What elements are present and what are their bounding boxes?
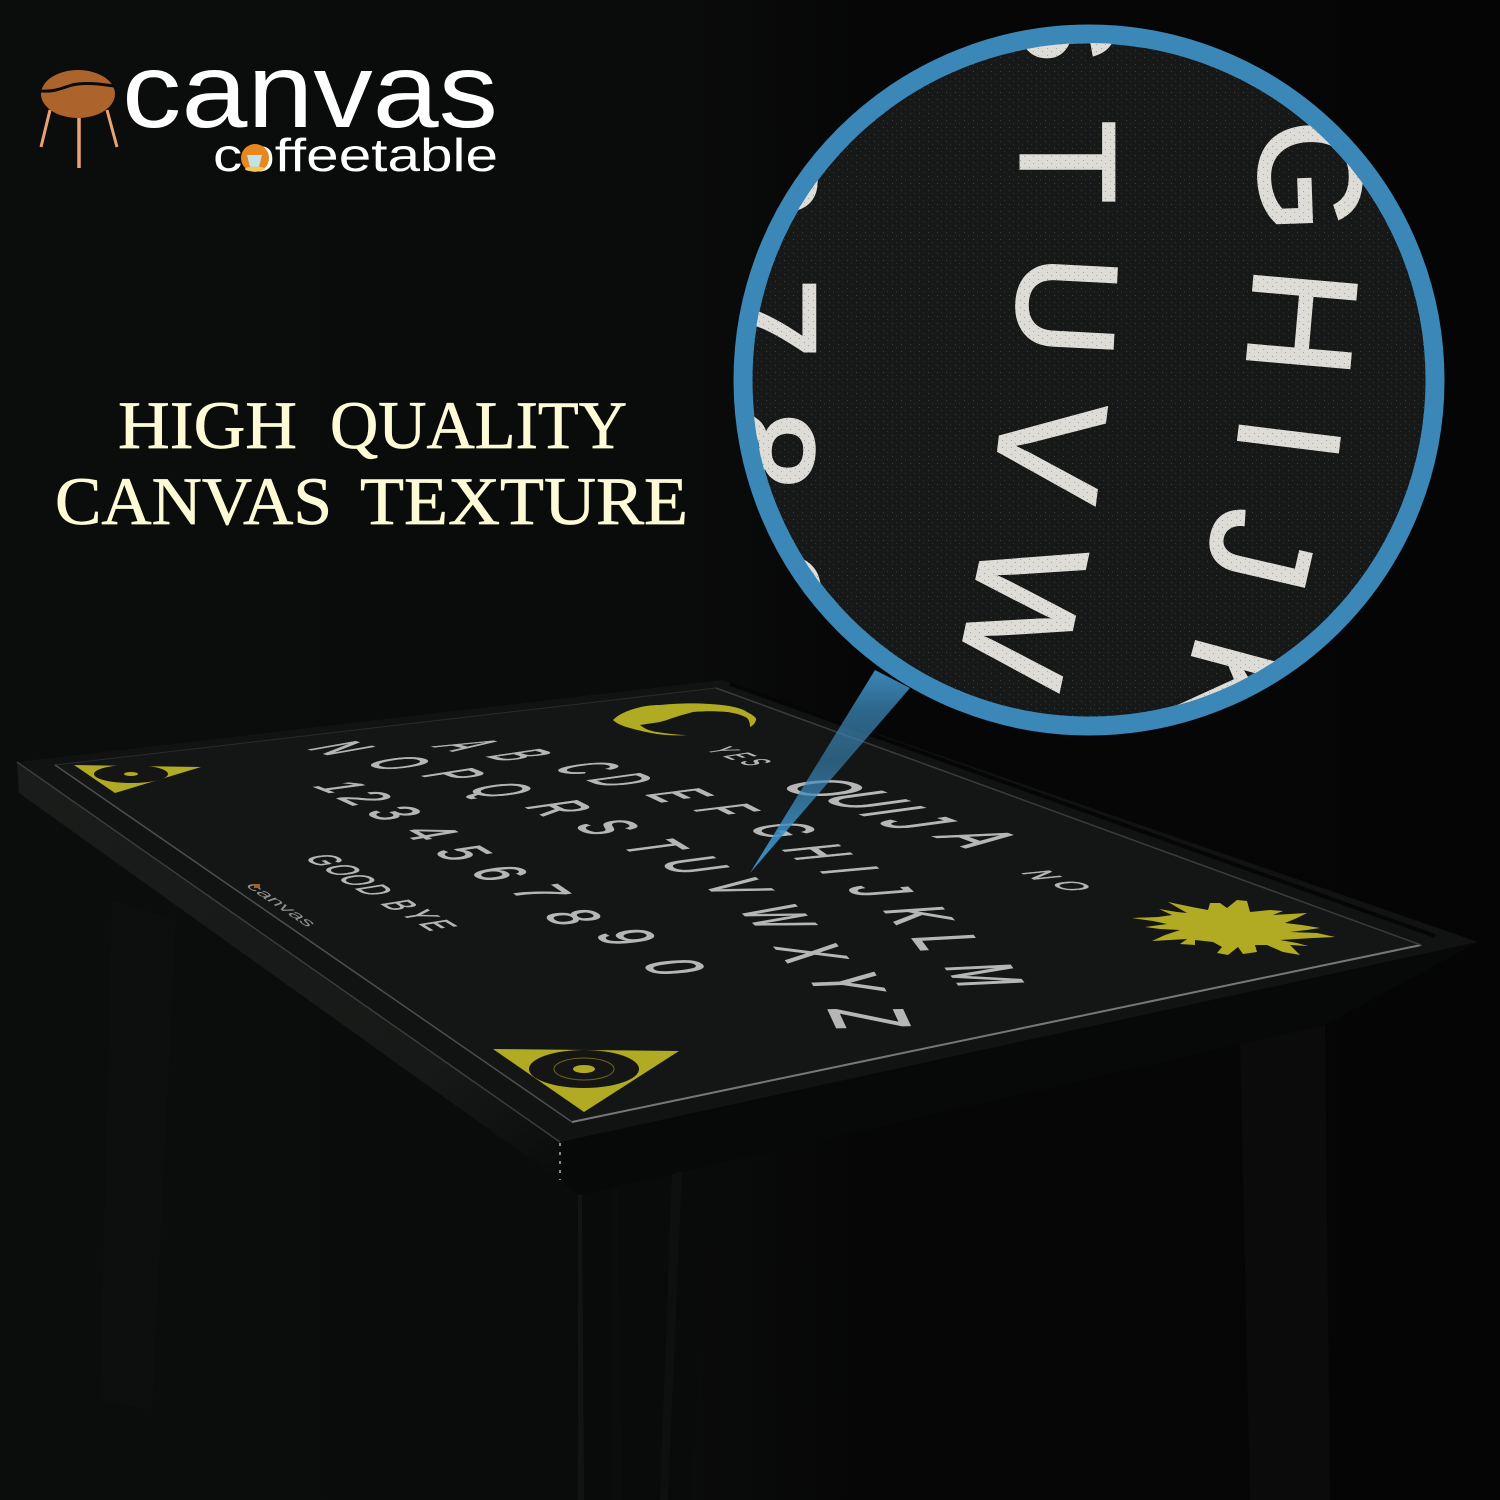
- headline line 1: QUALITY: [330, 387, 627, 463]
- magnified letters: 9: [686, 547, 850, 633]
- headline: [55, 387, 688, 539]
- canvas weave texture: [752, 43, 1426, 717]
- magnified letters: G: [1227, 117, 1393, 235]
- digit row: 7: [494, 881, 587, 903]
- small board logo: canvas: [241, 881, 320, 929]
- ouija title: I: [836, 802, 949, 820]
- headline line 2: TEXTURE: [360, 463, 688, 539]
- digit row: 6: [454, 862, 544, 885]
- alphabet row N to Z: X: [754, 941, 868, 965]
- alphabet row N to Z: T: [603, 836, 706, 858]
- digit row: 5: [418, 842, 507, 864]
- icon: bottom triangle eye: [493, 1049, 679, 1112]
- ouija title: J: [855, 811, 979, 833]
- ouija title: A: [913, 825, 1045, 851]
- ouija title: U: [798, 787, 933, 813]
- ouija title: [756, 774, 1045, 851]
- digit row: 8: [527, 906, 620, 929]
- alphabet row N to Z: [291, 738, 934, 1029]
- icon: coffee cup: [241, 144, 269, 172]
- magnified letters: 8: [681, 407, 845, 493]
- alphabet row A to M: B: [467, 746, 572, 764]
- no: O: [1040, 880, 1101, 893]
- alphabet row A to M: L: [891, 932, 1000, 952]
- magnified letters: 6: [684, 138, 846, 218]
- board lettering: [291, 736, 1101, 1029]
- wordmark: coffeetable: coffeetable: [213, 129, 498, 181]
- magnified letters: T: [992, 121, 1143, 203]
- alphabet row N to Z: Z: [805, 1007, 934, 1029]
- alphabet row N to Z: V: [685, 875, 791, 899]
- magnified letters: V: [962, 391, 1137, 509]
- alphabet row A to M: A: [415, 736, 522, 754]
- no: [1010, 869, 1101, 893]
- alphabet row N to Z: N: [291, 738, 392, 758]
- yes: [696, 745, 780, 767]
- alphabet row N to Z: P: [404, 765, 505, 785]
- alphabet row A to M: K: [864, 904, 973, 926]
- good bye: D: [344, 882, 403, 898]
- good bye: O: [327, 872, 387, 888]
- alphabet row A to M: C: [534, 758, 639, 778]
- no: N: [1010, 869, 1071, 881]
- icon: crescent moon: [613, 703, 756, 735]
- right side face: [560, 942, 1478, 1195]
- digit row: 2: [322, 787, 409, 809]
- digit row: 0: [624, 956, 725, 978]
- magnified letters: I: [1206, 409, 1372, 469]
- digit row: 3: [350, 802, 438, 824]
- icon: sun: [1132, 900, 1335, 955]
- alphabet row A to M: J: [828, 881, 930, 899]
- good bye: E: [408, 918, 466, 933]
- wordmark: canvas: canvas: [122, 32, 498, 150]
- magnified letters: [681, 0, 1393, 758]
- alphabet row A to M: [415, 736, 1045, 988]
- digit row: 9: [578, 926, 674, 949]
- frame: [17, 680, 1478, 1142]
- alphabet row A to M: D: [568, 770, 673, 790]
- icon: left triangle eye: [74, 765, 201, 793]
- callout pointer: [750, 670, 910, 873]
- headline line 1: HIGH: [118, 387, 297, 463]
- magnified letters: U: [985, 251, 1148, 361]
- yes: S: [729, 757, 780, 767]
- table: top and edges: [17, 680, 1478, 1195]
- alphabet row N to Z: Q: [450, 779, 554, 801]
- alphabet row A to M: H: [764, 841, 871, 863]
- headline line 1: [118, 387, 627, 463]
- good bye: Y: [390, 908, 448, 923]
- alphabet row A to M: I: [802, 863, 898, 877]
- alphabet row N to Z: O: [348, 752, 451, 774]
- logo: [41, 32, 498, 181]
- magnified letters: H: [1215, 262, 1388, 382]
- yes: E: [713, 751, 764, 761]
- headline line 2: [55, 463, 688, 539]
- good bye: B: [370, 898, 428, 913]
- alphabet row A to M: F: [675, 801, 777, 820]
- good bye: O: [312, 862, 372, 878]
- alphabet row A to M: M: [924, 962, 1045, 988]
- magnified letters: J: [1174, 496, 1348, 604]
- good bye: G: [294, 852, 354, 868]
- digit row: 4: [385, 822, 475, 844]
- alphabet row A to M: E: [627, 785, 730, 805]
- headline line 2: CANVAS: [55, 463, 332, 539]
- alphabet row N to Z: U: [641, 853, 748, 877]
- icon: coffee bean table: [41, 70, 117, 168]
- magnified letters: K: [1144, 622, 1326, 758]
- digit row: [298, 779, 725, 978]
- alphabet row N to Z: W: [720, 903, 834, 932]
- magnified letters: 7: [684, 278, 846, 358]
- alphabet row N to Z: S: [556, 816, 657, 838]
- alphabet row A to M: G: [729, 819, 838, 841]
- left side face: [17, 762, 560, 1180]
- magnifier lens: [734, 24, 1444, 736]
- ouija title: O: [756, 774, 893, 802]
- good bye: [294, 852, 466, 933]
- table legs: [100, 900, 1330, 1500]
- digit row: 1: [298, 779, 385, 795]
- board surface: [55, 688, 1421, 1122]
- alphabet row N to Z: Y: [786, 971, 906, 995]
- alphabet row N to Z: R: [507, 797, 610, 819]
- yes: Y: [696, 745, 747, 755]
- magnified letters: W: [926, 526, 1120, 699]
